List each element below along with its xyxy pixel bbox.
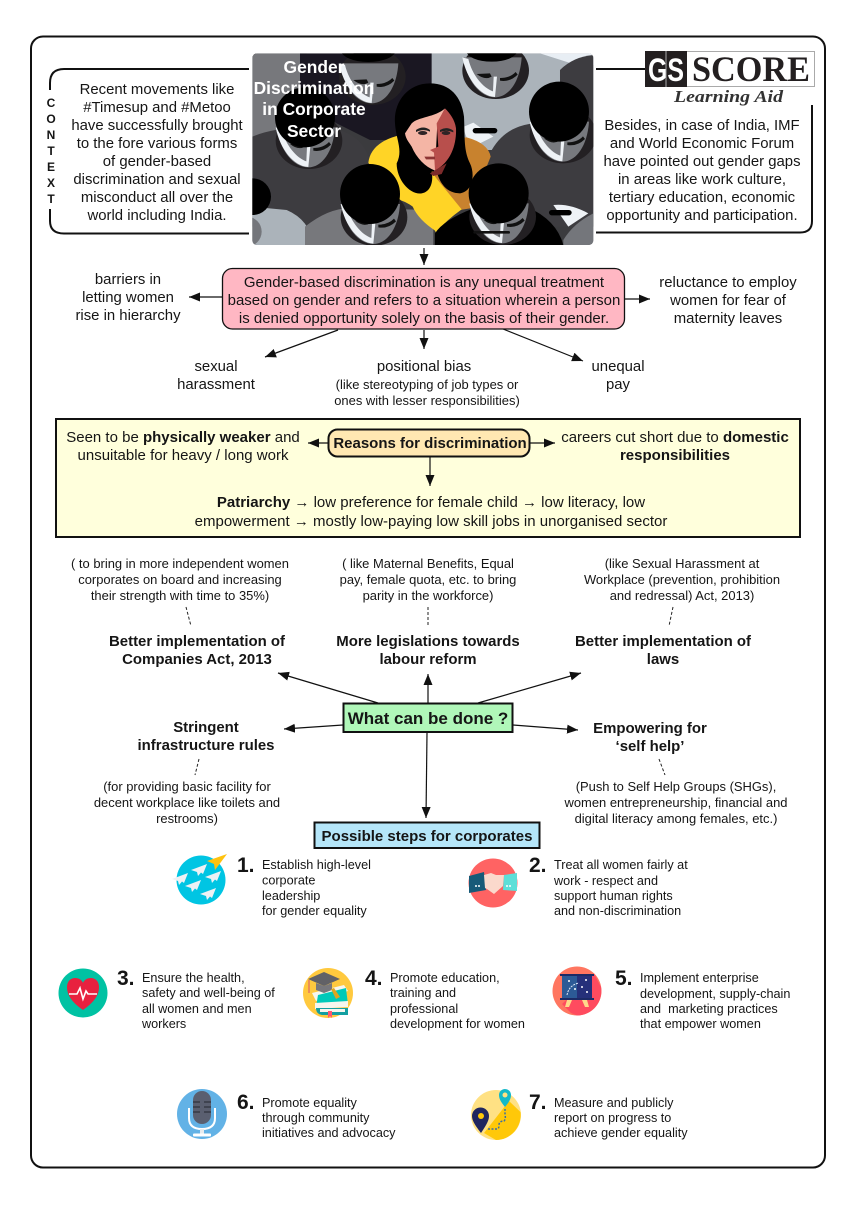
text: barriers: barriers in	[95, 272, 161, 288]
arrow: to positional bias	[423, 330, 425, 349]
step 1 text: leadership	[262, 889, 320, 903]
number 3: 3.	[117, 967, 135, 990]
hero title: in Corporate	[262, 99, 366, 119]
step 3 text: all women and men	[142, 1002, 252, 1016]
text: barriers: rise in hierarchy	[75, 308, 181, 324]
note: laws: (like Sexual Harassment at	[605, 556, 760, 571]
step 4 text: Promote education,	[390, 971, 500, 985]
context text: discrimination and sexual	[73, 172, 241, 188]
reason: physically weaker: Seen to be physically weaker and	[66, 429, 300, 446]
context vertical label: E	[47, 160, 55, 174]
arrow: to self help	[513, 725, 578, 730]
step 4 text: development for women	[390, 1017, 525, 1031]
step 1	[172, 854, 371, 918]
definition box: based on gender and refers to a situation wherein a person	[228, 292, 620, 309]
icon: books and cap	[303, 968, 353, 1018]
step 5 text: development, supply-chain	[640, 987, 790, 1001]
step 7 text: Measure and publicly	[554, 1096, 674, 1110]
context text: to the fore various forms	[77, 136, 237, 152]
note: legislations: parity in the workforce)	[363, 588, 493, 603]
context text: misconduct all over the	[81, 190, 233, 206]
heading: self help: Empowering for	[593, 720, 707, 737]
text: unequal pay: pay	[606, 377, 631, 393]
number 4: 4.	[365, 967, 383, 990]
reason: patriarchy: Patriarchy → low preference for female child → low literacy, low	[217, 494, 645, 511]
arrow: to unequal pay	[503, 329, 583, 361]
step 2 text: support human rights	[554, 889, 673, 903]
right context text: have pointed out gender gaps	[603, 154, 801, 170]
step 7	[471, 1089, 688, 1140]
definition box: is denied opportunity solely on the basis of their gender.	[239, 310, 609, 327]
step 3 text: Ensure the health,	[142, 971, 245, 985]
right context text: tertiary education, economic	[609, 190, 796, 206]
text: positional bias: (like stereotyping of job types or	[336, 377, 519, 392]
reason: physically weaker: unsuitable for heavy / long work	[78, 447, 289, 464]
icon: handshake	[468, 858, 518, 908]
step 7 text: achieve gender equality	[554, 1126, 688, 1140]
heading: companies act: Better implementation of	[109, 633, 285, 650]
reason: domestic responsibilities: responsibilities	[620, 447, 730, 464]
right context text: in areas like work culture,	[618, 172, 786, 188]
heading: self help: ‘self help’	[616, 738, 684, 755]
step 1 text: corporate	[262, 874, 315, 888]
possible steps box	[314, 822, 540, 848]
context bracket	[50, 69, 249, 234]
context text: world including India.	[86, 208, 227, 224]
step 2	[468, 854, 688, 918]
arrow: to laws	[478, 673, 581, 703]
step 5 text: and marketing practices	[640, 1002, 778, 1016]
heading: legislations: More legislations towards	[336, 633, 520, 650]
context vertical label: T	[47, 192, 55, 206]
note: legislations: ( like Maternal Benefits, Equal	[342, 556, 514, 571]
reasons heading	[328, 430, 530, 456]
text: reluctance: reluctance to employ	[659, 275, 797, 291]
note: laws: and redressal) Act, 2013)	[610, 588, 754, 603]
hero title: Sector	[287, 121, 341, 141]
logo: GS Score Learning Aid: GS	[648, 52, 684, 88]
icon: paper planes	[172, 854, 227, 904]
text: unequal pay: unequal	[592, 359, 644, 375]
arrow left	[308, 442, 328, 444]
step 4 text: training and	[390, 986, 456, 1000]
logo: GS Score Learning Aid	[596, 49, 814, 106]
note: companies act: their strength with time to 35%)	[91, 588, 269, 603]
note: infrastructure: decent workplace like toilets and	[94, 795, 280, 810]
reasons heading: Reasons for discrimination	[333, 435, 527, 452]
arrow: to barriers	[189, 296, 222, 298]
note: self help: (Push to Self Help Groups (SHGs),	[576, 779, 776, 794]
note: legislations: pay, female quota, etc. to bring	[340, 572, 516, 587]
number 1: 1.	[237, 854, 255, 877]
step 3 text: workers	[141, 1017, 186, 1031]
arrow: to companies act	[278, 673, 378, 703]
arrow: to possible steps	[426, 733, 427, 818]
context vertical label: C	[47, 96, 56, 110]
step 5 text: that empower women	[640, 1017, 761, 1031]
context text: #Timesup and #Metoo	[83, 100, 231, 116]
icon: map route	[471, 1089, 521, 1140]
heading: laws: Better implementation of	[575, 633, 751, 650]
right context text: opportunity and participation.	[606, 208, 798, 224]
logo: GS Score Learning Aid: SCORE	[692, 49, 810, 89]
reason: patriarchy: empowerment → mostly low-paying low skill jobs in unorganised sector	[195, 513, 667, 530]
text: sexual harassment: sexual	[194, 359, 238, 375]
step 1 text: Establish high-level	[262, 858, 371, 872]
text: sexual harassment: harassment	[177, 377, 256, 393]
number 7: 7.	[529, 1091, 547, 1114]
step 4 text: professional	[390, 1002, 458, 1016]
right context text: and World Economic Forum	[610, 136, 794, 152]
step 7 text: report on progress to	[554, 1111, 671, 1125]
step 3 text: safety and well-being of	[142, 986, 275, 1000]
step 6 text: initiatives and advocacy	[262, 1126, 396, 1140]
context text: of gender-based	[103, 154, 211, 170]
right bracket	[596, 105, 812, 232]
note: self help: women entrepreneurship, financial and	[564, 795, 787, 810]
context vertical label: N	[47, 128, 55, 142]
woman	[368, 136, 437, 233]
text: reluctance: maternity leaves	[674, 311, 782, 327]
text: positional bias: ones with lesser responsibilities)	[334, 393, 520, 408]
arrow down	[429, 457, 431, 486]
context vertical label: T	[47, 144, 55, 158]
step 6 text: Promote equality	[262, 1096, 358, 1110]
definition box: Gender-based discrimination is any unequal treatment	[244, 274, 605, 291]
arrow: to reluctance	[625, 298, 650, 300]
arrow: image to definition	[423, 248, 425, 265]
number 5: 5.	[615, 967, 633, 990]
icon: heart pulse	[58, 968, 108, 1018]
heading: companies act: Companies Act, 2013	[122, 651, 272, 668]
text: positional bias: positional bias	[377, 359, 471, 375]
note: companies act: ( to bring in more independent women	[71, 556, 289, 571]
arrow: to infrastructure	[284, 725, 343, 729]
step 4	[303, 967, 525, 1031]
step 6	[177, 1089, 396, 1140]
context text: Recent movements like	[80, 82, 234, 98]
what can be done box	[344, 704, 512, 732]
arrow right	[530, 442, 555, 444]
panel: context left	[46, 69, 249, 234]
right context text: Besides, in case of India, IMF	[604, 118, 800, 134]
note: infrastructure: restrooms)	[156, 811, 218, 826]
step 5	[552, 966, 790, 1031]
step 2 text: Treat all women fairly at	[554, 858, 688, 872]
context vertical label: O	[46, 112, 56, 126]
panel: context right	[596, 105, 812, 232]
heading: infrastructure: infrastructure rules	[138, 737, 274, 754]
step 2 text: and non-discrimination	[554, 904, 681, 918]
icon: microphone	[177, 1089, 227, 1139]
note: infrastructure: (for providing basic facility for	[103, 779, 271, 794]
text: reluctance: women for fear of	[669, 293, 787, 309]
step 5 text: Implement enterprise	[640, 971, 759, 985]
step 6 text: through community	[262, 1111, 370, 1125]
note: self help: digital literacy among females, etc.)	[575, 811, 777, 826]
step 3	[58, 967, 275, 1031]
icon: blackboard	[552, 966, 602, 1016]
arrow: to legislations	[427, 674, 429, 703]
definition box	[222, 268, 624, 329]
number 2: 2.	[529, 854, 547, 877]
step 1 text: for gender equality	[262, 904, 367, 918]
reason: domestic responsibilities: careers cut short due to domestic	[561, 429, 789, 446]
what can be done box: What can be done ?	[348, 709, 508, 728]
heading: legislations: labour reform	[379, 651, 477, 668]
number 6: 6.	[237, 1091, 255, 1114]
arrow: to sexual harassment	[265, 330, 338, 357]
hero illustration	[252, 53, 594, 245]
context text: have successfully brought	[71, 118, 244, 134]
step 2 text: work - respect and	[553, 874, 658, 888]
hero title: Discrimination	[254, 78, 374, 98]
logo: GS Score Learning Aid: Learning Aid	[673, 87, 784, 106]
note: companies act: corporates on board and increasing	[78, 572, 282, 587]
possible steps box: Possible steps for corporates	[322, 828, 532, 845]
context vertical label: X	[47, 176, 55, 190]
text: barriers: letting women	[82, 290, 174, 306]
panel: reasons for discrimination	[56, 419, 800, 537]
note: laws: Workplace (prevention, prohibition	[584, 572, 780, 587]
heading: infrastructure: Stringent	[173, 719, 239, 736]
heading: laws: laws	[647, 651, 679, 668]
hero title: Gender	[284, 57, 345, 77]
